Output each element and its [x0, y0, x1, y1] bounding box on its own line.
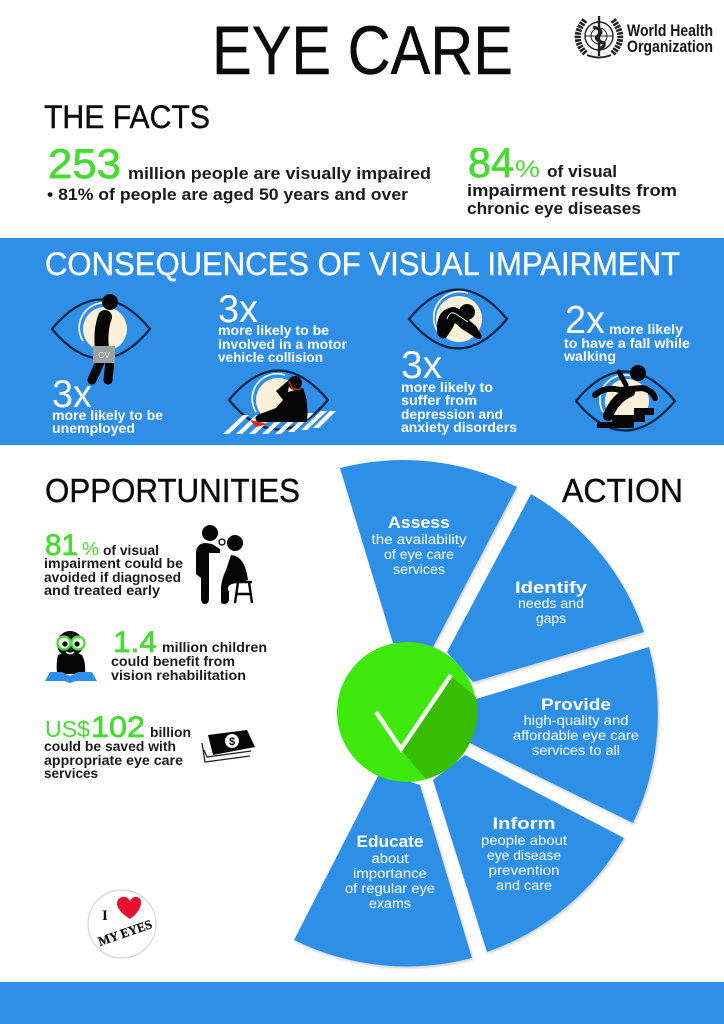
wedge: educate: of regular eye — [345, 880, 435, 896]
wedge: educate — [294, 772, 472, 966]
fact: 253 million: million people are visually impaired — [128, 165, 431, 183]
opportunity: US$102 billion — [44, 711, 191, 781]
opportunity: 81%: avoided if diagnosed — [44, 570, 181, 585]
stat: unemployed — [52, 373, 164, 436]
icon: stack of money — [202, 730, 255, 762]
badge: I love my eyes: I — [102, 908, 108, 924]
opportunity: 81%: 81 — [45, 529, 78, 562]
fact: 84%: impairment results from — [467, 182, 677, 200]
opportunity: 81%: impairment could be — [44, 556, 184, 571]
wedge: educate: Educate — [356, 833, 424, 851]
stat: unemployed: unemployed — [52, 421, 135, 436]
stat: depression and anxiety — [401, 344, 517, 435]
stat: unemployed: 3x — [52, 373, 92, 416]
stat: vehicle collision: 3x — [218, 288, 258, 331]
opportunity: 81%: % — [82, 539, 99, 559]
fact: 253 million — [47, 140, 431, 204]
wedge: inform: Inform — [492, 815, 556, 833]
wedge: inform: people about — [481, 832, 567, 848]
wedge: assess: the availability — [372, 531, 466, 547]
wedge: provide: services to all — [532, 742, 620, 758]
title: EYE CARE — [212, 12, 513, 89]
logo: World Health Organization — [578, 16, 713, 58]
footer band — [0, 982, 724, 1024]
stat: fall while walking: 2x — [565, 299, 605, 342]
wedge: inform: eye disease — [487, 847, 561, 863]
wedge: assess: services — [393, 561, 445, 577]
opportunity: 81%: of visual — [103, 543, 159, 558]
opportunity: 81%: and treated early — [44, 583, 161, 598]
wedge: assess: Assess — [388, 514, 450, 532]
stat: fall while walking — [563, 299, 691, 364]
stat: unemployed: more likely to be — [52, 408, 164, 423]
opportunity: US$102 billion: services — [44, 766, 98, 781]
wedge: provide: high-quality and — [524, 712, 628, 728]
icon: heart — [117, 897, 141, 919]
icon: eye with job seeker: CV — [98, 350, 110, 360]
wedge: educate: about — [372, 850, 409, 866]
wedge: identify — [447, 494, 644, 682]
opportunity: 1.4 million — [111, 626, 267, 683]
stat: depression and anxiety: more likely to — [401, 380, 493, 395]
badge: I love my eyes — [88, 890, 156, 958]
stat: fall while walking: walking — [563, 349, 616, 364]
opportunity: 1.4 million: million children — [162, 640, 267, 655]
stat: depression and anxiety: anxiety disorders — [401, 420, 517, 435]
stat: vehicle collision: involved in a motor — [218, 337, 348, 352]
stat: depression and anxiety: suffer from — [401, 393, 477, 408]
fact: 84%: chronic eye diseases — [467, 200, 641, 218]
wedge: assess — [340, 460, 517, 647]
badge: I love my eyes: MY EYES — [96, 916, 154, 949]
wedge: provide: Provide — [541, 696, 611, 714]
wedge: educate: importance — [353, 865, 427, 881]
wedge: provide: affordable eye care — [513, 727, 639, 743]
wedge: inform: prevention — [488, 862, 560, 878]
wedge: identify: gaps — [536, 610, 566, 626]
heading: action: ACTION — [562, 472, 683, 509]
icon: eye with falling person — [576, 365, 675, 430]
wedge: identify: needs and — [518, 595, 584, 611]
fact: 84%: 84 — [468, 139, 514, 186]
opportunity: 1.4 million: could benefit from — [111, 654, 235, 669]
heading: the facts: THE FACTS — [44, 99, 210, 135]
stat: depression and anxiety: depression and — [401, 407, 503, 422]
panel: consequences of visual impairment — [0, 238, 724, 445]
wedge: educate: exams — [369, 895, 411, 911]
logo text — [627, 22, 713, 56]
fact: 253 million: • 81% of people are aged 50 years and over — [47, 186, 409, 204]
fact: 253 million: 253 — [48, 140, 121, 187]
icon: stack of money: $ — [229, 736, 235, 748]
chart: action wheel — [294, 460, 658, 966]
icon: WHO emblem — [578, 16, 620, 58]
icon: green check circle — [337, 642, 478, 782]
fact: 84%: % — [515, 156, 540, 183]
stat: fall while walking: more likely — [609, 322, 684, 337]
icon: child with glasses reading — [45, 631, 97, 683]
opportunity: US$102 billion: appropriate eye care — [44, 753, 184, 768]
wedge: assess: of eye care — [384, 546, 454, 562]
stat: depression and anxiety: 3x — [401, 344, 442, 387]
stat: vehicle collision: vehicle collision — [218, 350, 323, 365]
opportunity: 1.4 million: 1.4 — [113, 626, 157, 659]
opportunity: US$102 billion: could be saved with — [44, 739, 176, 754]
icon: eye examination — [196, 525, 252, 604]
opportunity: US$102 billion: 102 — [91, 711, 145, 744]
wedge: provide — [470, 647, 658, 823]
heading: opportunities: OPPORTUNITIES — [45, 472, 300, 509]
icon: eye with depressed person — [409, 290, 507, 348]
icon: eye with collision victim — [223, 370, 336, 434]
wedge: identify: Identify — [515, 579, 588, 597]
icon: eye with job seeker — [52, 294, 150, 380]
fact: 84% — [467, 139, 677, 218]
opportunity: US$102 billion: billion — [150, 725, 191, 740]
fact: 84%: of visual — [547, 163, 617, 181]
stat: vehicle collision: more likely to be — [218, 323, 330, 338]
stat: fall while walking: to have a fall while — [564, 336, 691, 351]
wedge: inform — [433, 755, 624, 952]
opportunity: 1.4 million: vision rehabilitation — [111, 668, 246, 683]
opportunity: 81% — [44, 529, 184, 598]
stat: vehicle collision — [218, 288, 348, 365]
heading: consequences: CONSEQUENCES OF VISUAL IMPAIRMENT — [45, 246, 680, 282]
opportunity: US$102 billion: US$ — [45, 716, 90, 742]
wedge: inform: and care — [496, 877, 552, 893]
